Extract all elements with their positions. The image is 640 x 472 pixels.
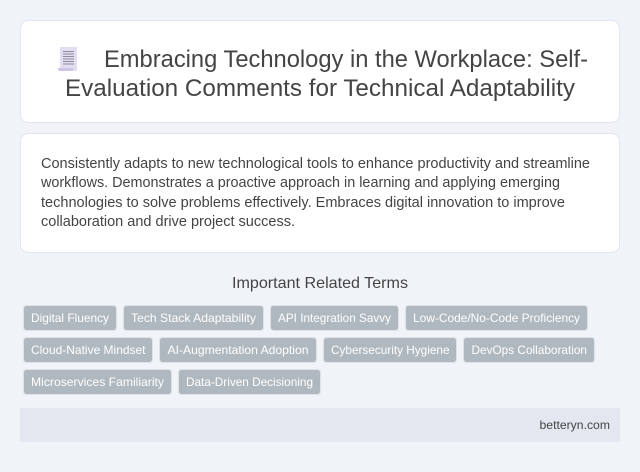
tag: Cybersecurity Hygiene — [324, 338, 456, 362]
tag: Low-Code/No-Code Proficiency — [406, 306, 588, 330]
title: Evaluation Comments for Technical Adaptability — [65, 75, 575, 102]
tag: Cloud-Native Mindset: Cloud-Native Mindset — [31, 343, 146, 357]
tag: Digital Fluency — [24, 306, 116, 330]
tag: Microservices Familiarity: Microservices Familiarity — [31, 375, 164, 389]
summary paragraph: Consistently adapts to new technological tools to enhance productivity and streamline — [41, 156, 590, 172]
tag: Low-Code/No-Code Proficiency: Low-Code/No-Code Proficiency — [413, 311, 580, 325]
tag: Data-Driven Decisioning — [178, 370, 320, 394]
tag list — [24, 306, 594, 394]
panel: title card — [20, 20, 620, 122]
tag: Digital Fluency: Digital Fluency — [31, 311, 109, 325]
summary paragraph: workflows. Demonstrates a proactive approach in learning and applying emerging — [40, 175, 560, 191]
icon: document scroll — [58, 47, 77, 71]
tag: Cloud-Native Mindset — [24, 338, 152, 362]
tag: API Integration Savvy — [270, 306, 398, 330]
tag: AI-Augmentation Adoption: AI-Augmentation Adoption — [168, 343, 308, 357]
tag: API Integration Savvy: API Integration Savvy — [278, 311, 391, 325]
tag: Microservices Familiarity — [24, 370, 172, 394]
tag: DevOps Collaboration — [464, 338, 594, 362]
summary paragraph: technologies to solve problems effectively. Embraces digital innovation to improve — [41, 195, 565, 211]
footer credit: betteryn.com — [540, 418, 610, 432]
panel: summary card — [20, 134, 620, 252]
tag: Cybersecurity Hygiene: Cybersecurity Hygiene — [331, 343, 450, 357]
tag: Tech Stack Adaptability — [124, 306, 264, 330]
summary paragraph — [40, 156, 590, 230]
summary paragraph: collaboration and drive project success. — [41, 214, 295, 230]
heading: related terms: Important Related Terms — [232, 275, 408, 292]
tag: Data-Driven Decisioning: Data-Driven Decisioning — [186, 375, 313, 389]
title — [65, 46, 588, 102]
tag: DevOps Collaboration: DevOps Collaboration — [472, 343, 587, 357]
tag: Tech Stack Adaptability: Tech Stack Adaptability — [131, 311, 256, 325]
title: Embracing Technology in the Workplace: Self- — [104, 46, 588, 73]
footer bar — [20, 408, 620, 442]
tag: AI-Augmentation Adoption — [160, 338, 316, 362]
